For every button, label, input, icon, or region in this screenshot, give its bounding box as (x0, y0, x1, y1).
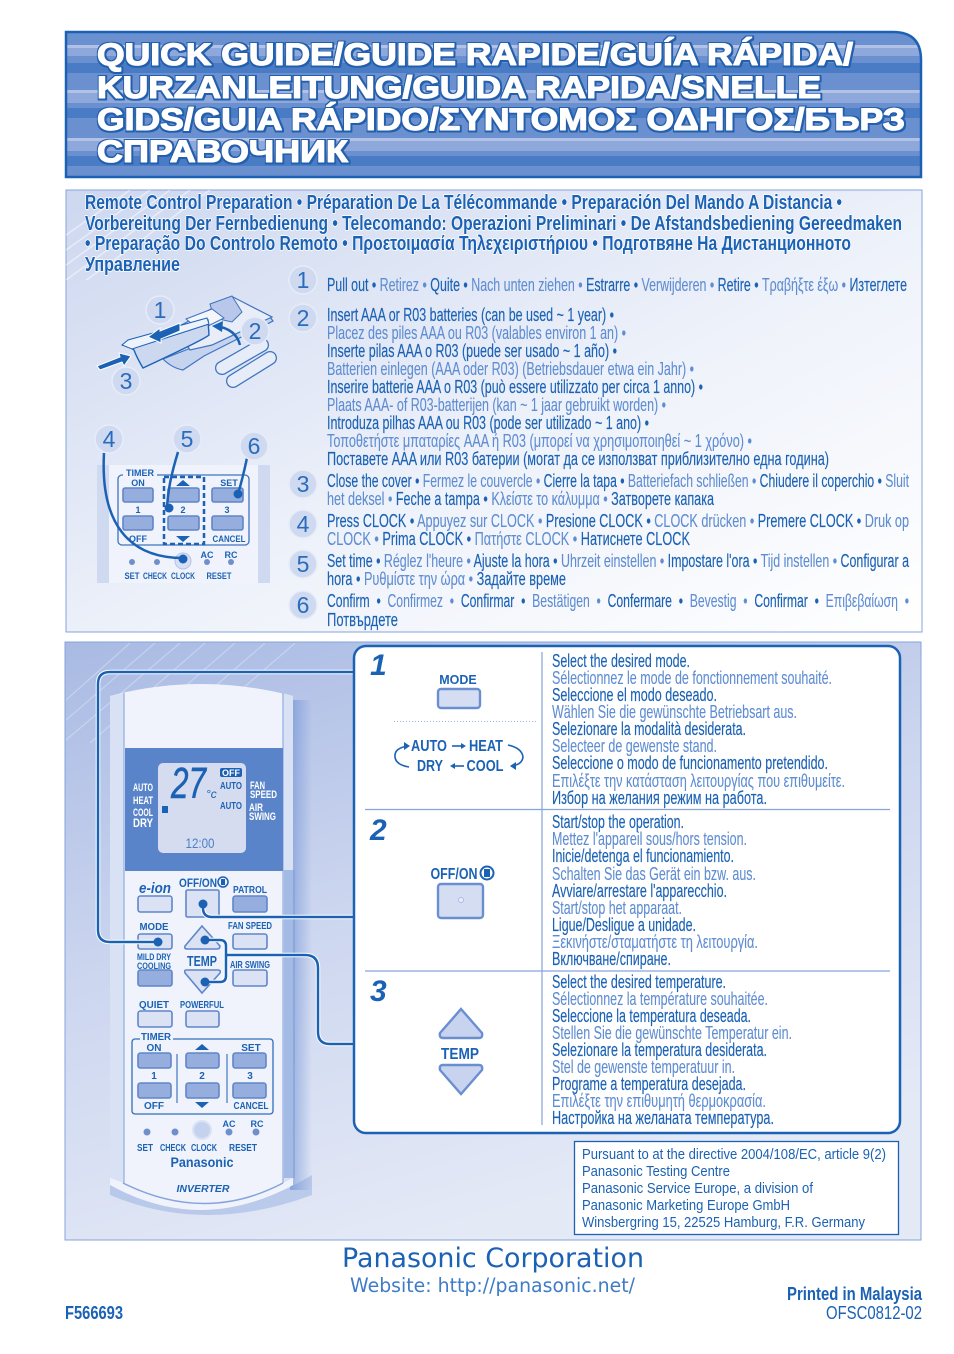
step 3: temp: 3 (370, 975, 387, 1008)
header banner (66, 32, 921, 177)
text: step 2: Mettez l'appareil sous/hors tension. (552, 829, 747, 849)
illustration: battery installation (97, 296, 273, 395)
remote labels: CHECK (160, 1143, 187, 1154)
remote labels: RESET (229, 1143, 257, 1154)
step 2: insert batteries: 2 (297, 305, 309, 331)
footer: panasonic corporation (342, 1243, 644, 1297)
display panel: SPEED (250, 789, 277, 801)
step 2: insert batteries: Inserte pilas AAA o R03 (puede ser usado ~ 1 año) • (327, 341, 617, 361)
illustration: timer buttons: SET (124, 571, 140, 581)
step 4: press clock: Press CLOCK • Appuyez sur CLOCK • Presione CLOCK • CLOCK drücken • Premere CLOCK • Druk op (327, 511, 909, 531)
illustration: timer buttons: 3 (224, 505, 230, 515)
remote labels: INVERTER (176, 1184, 230, 1195)
step 4: press clock (289, 510, 909, 549)
text: step 1: Seleccione el modo deseado. (552, 685, 717, 705)
remote labels: 1 (151, 1071, 157, 1082)
remote labels: MODE (140, 922, 169, 933)
number 3: 3 (120, 368, 132, 394)
step 2: insert batteries: Inserire batterie AAA o R03 (può essere utilizzato per circa 1 anno) • (327, 377, 703, 397)
illustration: timer buttons (95, 425, 270, 583)
display panel: AUTO (220, 801, 242, 812)
display panel: AUTO (220, 781, 242, 792)
display panel: OFF (222, 768, 240, 778)
number 4 (95, 425, 123, 453)
number 6 (240, 432, 268, 460)
step 1: mode (370, 649, 536, 775)
remote control illustration (110, 684, 312, 1215)
illustration: timer buttons: SET (220, 478, 238, 488)
heading: remote control preparation: Управление (85, 253, 180, 276)
step 1: mode: COOL (466, 758, 504, 775)
remote labels: MILD DRY (137, 952, 171, 963)
step 6: confirm: 6 (297, 592, 309, 618)
remote labels: FAN SPEED (228, 921, 272, 932)
remote labels: AC (222, 1119, 236, 1129)
text: step 3: Настройка на желаната температура. (552, 1108, 774, 1128)
panel: remote control preparation (66, 190, 922, 632)
connector lines (98, 672, 354, 1044)
display panel (125, 748, 283, 871)
step 4: press clock: 4 (297, 511, 310, 537)
step 5: set time: Set time • Réglez l'heure • Ajuste la hora • Uhrzeit einstellen • Impostare l'ora • Tijd instellen • Configurar a (327, 551, 910, 571)
title (97, 36, 905, 169)
footer: print info (787, 1284, 923, 1323)
illustration: timer buttons: 1 (135, 505, 141, 515)
remote labels: OFF (144, 1101, 164, 1112)
address box: Winsbergring 15, 22525 Hamburg, F.R. Germany (582, 1215, 866, 1231)
illustration: timer buttons: AC (200, 550, 214, 560)
illustration: timer buttons: RC (224, 550, 238, 560)
text: step 3: Seleccione la temperatura deseada. (552, 1006, 751, 1026)
text: step 3: Stel de gewenste temperatuur in. (552, 1057, 735, 1077)
illustration: timer buttons: RESET (206, 571, 232, 581)
address box: Pursuant to at the directive 2004/108/EC, article 9(2) (582, 1147, 886, 1163)
text: step 3: Sélectionnez la température souhaitée. (552, 989, 768, 1009)
text: step 2 (552, 812, 758, 969)
remote labels: SET (137, 1143, 153, 1154)
remote labels: OFF/ON (179, 876, 217, 890)
text: step 1: Selecteer de gewenste stand. (552, 736, 717, 756)
remote labels: PATROL (233, 885, 267, 896)
remote labels: QUIET (139, 1000, 169, 1011)
step 2: off/on: 2 (369, 814, 387, 847)
step 5: set time (289, 550, 910, 589)
step 3: temp: TEMP (441, 1046, 479, 1063)
address box: Panasonic Testing Centre (582, 1164, 730, 1180)
display panel: COOL (133, 807, 153, 819)
title: GIDS/GUIA RÁPIDO/ΣΥΝΤΟΜΟΣ ΟΔΗΓΟΣ/БЪРЗ (97, 101, 905, 137)
step 2: off/on: OFF/ON (430, 866, 478, 883)
step 5: set time: hora • Ρυθμίστε την ώρα • Задайте време (327, 569, 566, 589)
illustration: timer buttons: ON (131, 478, 145, 488)
number 3 (112, 367, 140, 395)
step 2: off/on (369, 814, 494, 918)
text: step 2: Ligue/Desligue a unidade. (552, 915, 696, 935)
text: step 2: Start/stop het apparaat. (552, 898, 682, 918)
text: step 2: Schalten Sie das Gerät ein bzw. aus. (552, 864, 756, 884)
remote labels: SET (241, 1043, 261, 1054)
illustration: timer buttons: TIMER (126, 468, 154, 478)
footer: part number: F566693 (65, 1303, 123, 1323)
text: step 3: Programe a temperatura desejada. (552, 1074, 746, 1094)
remote labels: TEMP (187, 953, 217, 970)
title: СПРАВОЧНИК (97, 133, 349, 169)
remote labels: AIR SWING (230, 960, 270, 971)
footer: panasonic corporation: Panasonic Corporation (342, 1243, 644, 1274)
step 3: close the cover: het deksel • Feche a tampa • Κλείστε το κάλυμμα • Затворете капака (327, 489, 715, 509)
text: step 1: Selezionare la modalità desiderata. (552, 719, 746, 739)
number 1: 1 (154, 297, 166, 323)
text: step 2: Start/stop the operation. (552, 812, 684, 832)
heading: remote control preparation (85, 191, 902, 276)
number 1 (146, 296, 174, 324)
number 5: 5 (181, 426, 193, 452)
step 1: pull out (289, 266, 907, 295)
text: step 1: Sélectionnez le mode de fonctionnement souhaité. (552, 668, 832, 688)
step 1: mode: AUTO (411, 738, 447, 755)
text: step 1: Select the desired mode. (552, 651, 690, 671)
illustration: timer buttons: OFF (129, 534, 147, 544)
step 1: mode: HEAT (469, 738, 503, 755)
step 2: insert batteries: Insert AAA or R03 batteries (can be used ~ 1 year) • (327, 305, 614, 325)
remote buttons (132, 890, 273, 1139)
address box (574, 1142, 898, 1234)
text: step 1: Wählen Sie die gewünschte Betriebsart aus. (552, 702, 797, 722)
text: step 3: Selezionare la temperatura desiderata. (552, 1040, 767, 1060)
illustration: timer buttons: 2 (180, 505, 186, 515)
text: step 3: Select the desired temperature. (552, 972, 726, 992)
number 2: 2 (249, 318, 261, 344)
number 2 (241, 317, 269, 345)
number 4: 4 (103, 426, 116, 452)
display panel: °c (206, 787, 217, 801)
step 6: confirm (289, 591, 909, 630)
step 2: insert batteries: Plaats AAA- of R03-batterijen (kan ~ 1 jaar gebruikt worden) • (327, 395, 666, 415)
remote labels: POWERFUL (180, 1000, 224, 1011)
step 3: temp (370, 975, 482, 1094)
step 2: insert batteries: Batterien einlegen (AAA oder R03) (Betriebsdauer etwa ein Jahr) • (327, 359, 694, 379)
display panel: AIR (249, 802, 263, 814)
step 4: press clock: CLOCK • Prima CLOCK • Πατήστε CLOCK • Натиснете CLOCK (327, 529, 690, 549)
remote labels: ON (146, 1043, 162, 1054)
text: step 3: Stellen Sie die gewünschte Temperatur ein. (552, 1023, 792, 1043)
remote labels: TIMER (141, 1032, 172, 1043)
step 6: confirm: Confirm • Confirmez • Confirmar • Bestätigen • Confermare • Bevestig • Confirmar • Επιβεβαίωση • (327, 591, 909, 611)
number 6: 6 (248, 433, 260, 459)
step 3: close the cover: Close the cover • Fermez le couvercle • Cierre la tapa • Batteriefach schließen • Chiudere il coperchio • Sluit (327, 471, 909, 491)
footer: panasonic corporation: Website: http://panasonic.net/ (350, 1274, 635, 1297)
remote labels: 3 (247, 1071, 253, 1082)
remote labels: CANCEL (234, 1101, 268, 1112)
text: step 1 (552, 651, 845, 808)
step 1: mode: MODE (439, 673, 477, 687)
step 1: mode: DRY (417, 758, 443, 775)
remote labels: Panasonic (170, 1155, 234, 1170)
text: step 2: Включване/спиране. (552, 949, 671, 969)
illustration: timer buttons: CANCEL (212, 534, 246, 544)
step 6: confirm: Потвърдете (327, 610, 398, 630)
step 1: pull out: Pull out • Retirez • Quite • Nach unten ziehen • Estrarre • Verwijderen • Retire • Τραβήξτε έξω • Изтеглете (327, 275, 907, 295)
display panel: SWING (249, 811, 276, 823)
title: KURZANLEITUNG/GUIDA RAPIDA/SNELLE (97, 69, 821, 105)
illustration: timer buttons: CHECK (143, 571, 167, 581)
display panel: AUTO (133, 782, 153, 794)
step 2: insert batteries: Introduza pilhas AAA ou R03 (pode ser utilizado ~ 1 ano) • (327, 413, 649, 433)
illustration: timer buttons: CLOCK (171, 571, 195, 581)
step 2: insert batteries: Placez des piles AAA ou R03 (valables environ 1 an) • (327, 323, 626, 343)
address box: Panasonic Marketing Europe GmbH (582, 1198, 790, 1214)
display panel: 27 (170, 759, 207, 808)
text: step 3: Επιλέξτε την επιθυμητή θερμοκρασία. (552, 1091, 766, 1111)
step 1: pull out: 1 (297, 267, 309, 293)
display panel: DRY (133, 816, 153, 830)
step 3: close the cover (289, 470, 909, 509)
step 5: set time: 5 (297, 551, 309, 577)
display panel: HEAT (133, 795, 153, 807)
remote labels: COOLING (137, 961, 171, 972)
remote labels (137, 876, 272, 1195)
step 2: insert batteries (289, 304, 829, 469)
remote labels: RC (250, 1119, 264, 1129)
text: step 2: Avviare/arrestare l'apparecchio. (552, 881, 727, 901)
title: QUICK GUIDE/GUIDE RAPIDE/GUÍA RÁPIDA/ (97, 36, 853, 72)
number 5 (173, 425, 201, 453)
display panel: FAN (250, 780, 265, 792)
text: step 3 (552, 972, 792, 1128)
remote labels: e-ion (139, 880, 171, 897)
instructions box (354, 646, 900, 1133)
address box: Panasonic Service Europe, a division of (582, 1181, 814, 1197)
text: step 2: Inicie/detenga el funcionamiento. (552, 846, 734, 866)
step 1: mode: 1 (370, 649, 387, 682)
footer: print info: Printed in Malaysia (787, 1284, 923, 1304)
footer: print info: OFSC0812-02 (826, 1303, 922, 1323)
step 2: insert batteries: Τοποθετήστε μπαταρίες AAA ή R03 (μπορεί να χρησιμοποιηθεί ~ 1 χρόνο) • (327, 431, 752, 451)
display panel: 12:00 (186, 835, 215, 851)
remote labels: CLOCK (191, 1143, 218, 1154)
panel: operation (65, 642, 921, 1240)
text: step 1: Seleccione o modo de funcionamento pretendido. (552, 753, 828, 773)
text: step 2: Ξεκινήστε/σταματήστε τη λειτουργία. (552, 932, 758, 952)
step 3: close the cover: 3 (297, 471, 309, 497)
remote labels: 2 (199, 1071, 205, 1082)
text: step 1: Избор на желания режим на работа. (552, 788, 767, 808)
